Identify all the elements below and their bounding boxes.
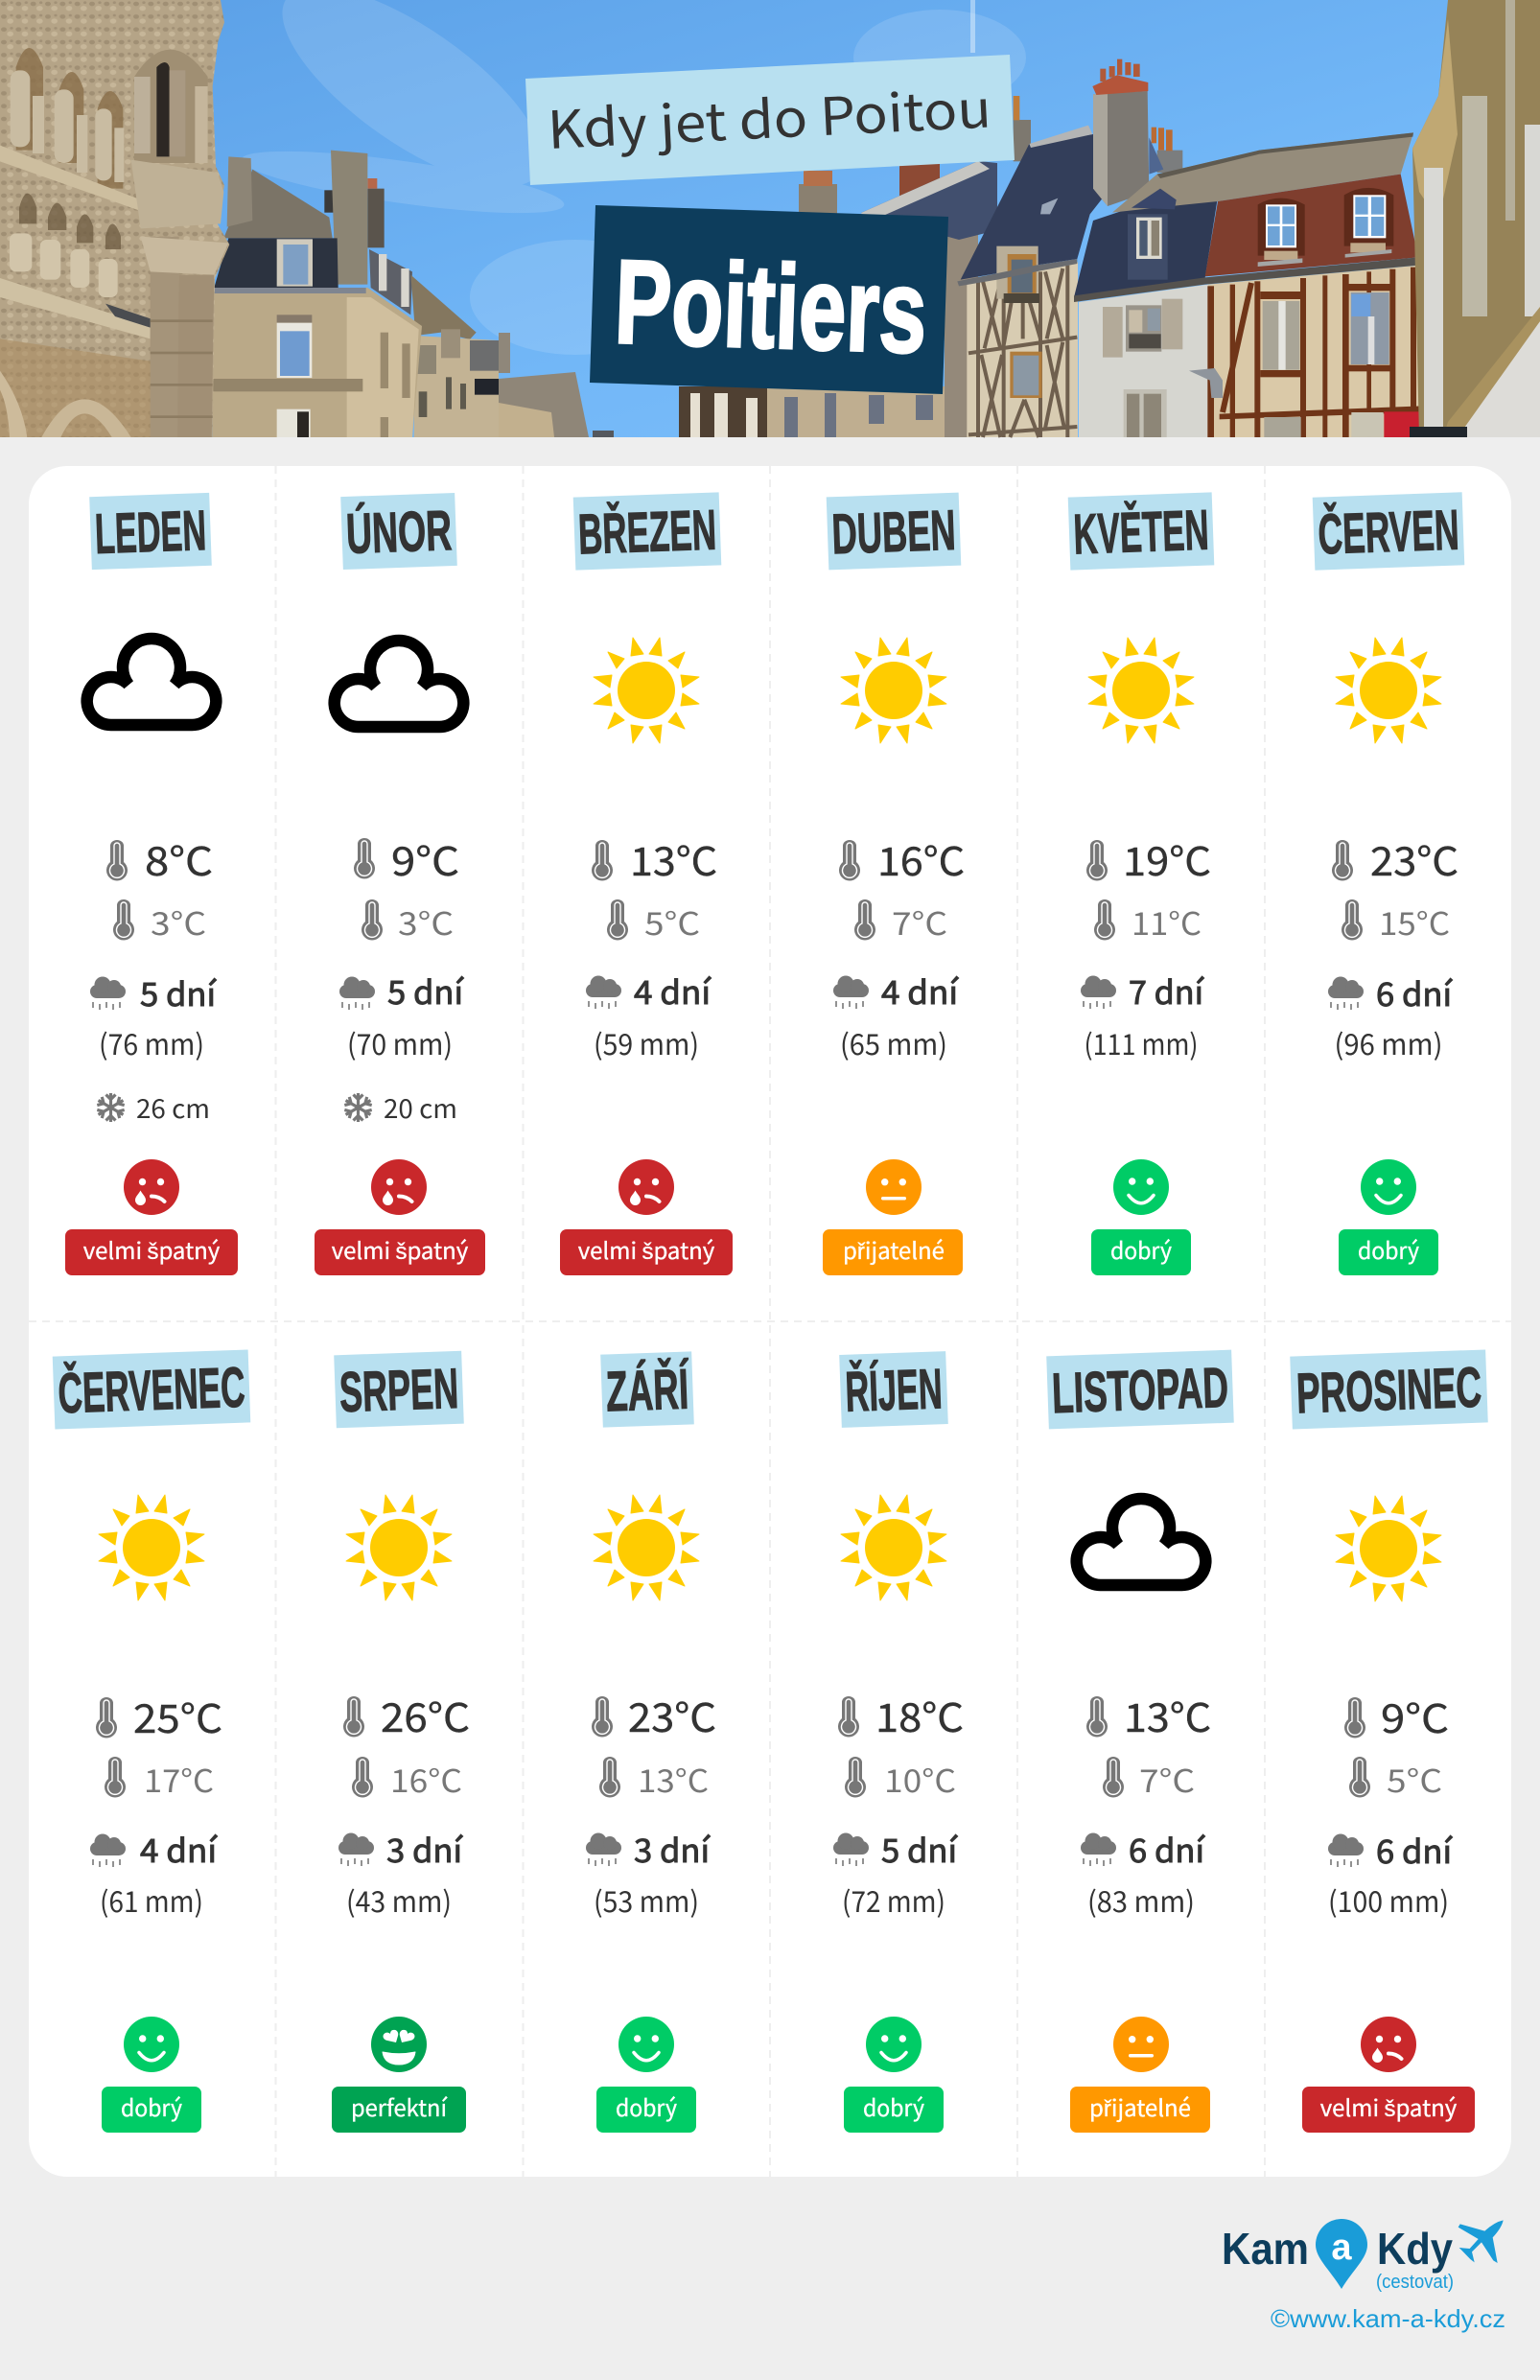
high temperature: 19°C: [1123, 829, 1211, 887]
rating badge: [844, 2087, 944, 2133]
cathedral: [0, 0, 229, 437]
icon: thermometer high: [343, 1696, 364, 1737]
month label: DUBEN: [830, 499, 957, 566]
icon: thermometer low: [362, 899, 383, 940]
precipitation: (61 mm): [100, 1878, 203, 1921]
rating badge: dobrý: [863, 2089, 924, 2123]
month label: [334, 1351, 464, 1428]
website credit: ©www.kam-a-kdy.cz: [1271, 2304, 1505, 2333]
high temperature: 26°C: [381, 1686, 470, 1743]
icon: rain: [1081, 1833, 1116, 1866]
icon: thermometer high: [592, 840, 613, 880]
icon: rating face: [1361, 1159, 1416, 1215]
panel: srpen: [332, 1351, 470, 2133]
icon: rain: [1081, 976, 1116, 1009]
icon: rain: [90, 976, 126, 1010]
icon: thermometer low: [1094, 899, 1115, 940]
icon: sun: [1088, 638, 1194, 743]
distant chimney and far buildings: [799, 184, 837, 217]
rating badge: [1339, 1229, 1438, 1275]
icon: thermometer low: [845, 1757, 866, 1797]
icon: rating face: [866, 2017, 922, 2072]
chimney right small: [1157, 151, 1182, 173]
low temperature: 5°C: [1387, 1756, 1442, 1802]
icon: sun: [99, 1495, 204, 1600]
rating badge: dobrý: [1110, 1232, 1172, 1266]
month label: ŘÍJEN: [844, 1356, 944, 1424]
month label: BŘEZEN: [577, 498, 717, 566]
snow depth: 20 cm: [384, 1088, 457, 1126]
icon: thermometer high: [592, 1696, 613, 1737]
logo: Kam a Kdy: a: [1331, 2228, 1352, 2268]
stone facade: [213, 288, 422, 437]
panel: listopad: [1046, 1350, 1234, 2133]
icon: rain: [586, 976, 621, 1009]
high temperature: 13°C: [1124, 1686, 1211, 1743]
icon: rating face: [1113, 2017, 1169, 2072]
rating badge: dobrý: [616, 2089, 677, 2123]
panel: zari: [586, 1351, 716, 2133]
precipitation: (76 mm): [99, 1021, 204, 1063]
high temperature: 18°C: [875, 1686, 964, 1743]
rating badge: velmi špatný: [578, 1232, 715, 1266]
big chimney: [1093, 91, 1149, 206]
panel: brezen: [560, 492, 733, 1275]
rating badge: [65, 1229, 238, 1275]
icon: rating face: [618, 1159, 674, 1215]
rating badge: přijatelné: [843, 1232, 945, 1266]
high temperature: 16°C: [877, 829, 965, 887]
rainy days: 5 dní: [881, 1825, 958, 1872]
high temperature: 25°C: [133, 1687, 222, 1744]
icon: sun: [594, 1495, 699, 1600]
icon: sun: [594, 638, 699, 743]
icon: rain: [833, 1833, 869, 1866]
month label: [827, 493, 961, 570]
photo right part: [945, 230, 978, 437]
icon: sun: [346, 1495, 452, 1600]
panel: kveten: [1068, 492, 1214, 1275]
icon: rain: [1328, 1833, 1364, 1867]
high temperature: 9°C: [1381, 1687, 1449, 1744]
slate roof A: [961, 134, 1108, 280]
rating badge: [332, 2087, 466, 2133]
slate roof B: [1074, 200, 1217, 297]
icon: cloud: [335, 641, 463, 727]
low temperature: 13°C: [638, 1756, 709, 1802]
right building: [1412, 0, 1540, 437]
rainy days: 6 dní: [1376, 968, 1453, 1015]
grid dashed dividers: [29, 466, 1511, 2177]
icon: thermometer high: [838, 1696, 859, 1737]
rainy days: 4 dní: [634, 967, 712, 1014]
precipitation: (83 mm): [1087, 1878, 1195, 1921]
icon: thermometer high: [1086, 1696, 1108, 1737]
low temperature: 17°C: [144, 1756, 214, 1802]
icon: thermometer low: [113, 899, 134, 940]
rainy days: 5 dní: [387, 967, 464, 1014]
precipitation: (43 mm): [346, 1878, 452, 1921]
rating badge: perfektní: [351, 2089, 448, 2123]
white building: [1079, 285, 1208, 437]
icon: rating face: [866, 1159, 922, 1215]
precipitation: (100 mm): [1328, 1878, 1449, 1921]
rating badge: [102, 2087, 201, 2133]
rainy days: 7 dní: [1129, 967, 1204, 1014]
half-timber A: [967, 262, 1078, 437]
icon: rain: [339, 976, 375, 1010]
snow depth: 26 cm: [136, 1088, 210, 1126]
precipitation: (96 mm): [1335, 1021, 1442, 1063]
rainy days: 4 dní: [881, 967, 959, 1014]
icon: rain: [833, 976, 869, 1009]
panel: prosinec: [1290, 1349, 1488, 2133]
month label: [53, 1349, 250, 1430]
icon: thermometer high: [1344, 1697, 1365, 1738]
rainy days: 3 dní: [634, 1825, 711, 1872]
left roofs: [223, 170, 333, 238]
icon: rating face: [371, 2017, 427, 2072]
rating badge: dobrý: [121, 2089, 182, 2123]
icon: thermometer low: [607, 899, 628, 940]
icon: thermometer low: [854, 899, 875, 940]
low temperature: 11°C: [1132, 898, 1202, 945]
icon: thermometer high: [1332, 840, 1353, 880]
icon: rating face: [124, 1159, 179, 1215]
icon: thermometer low: [599, 1757, 620, 1797]
low temperature: 7°C: [892, 898, 947, 945]
month label: [1046, 1350, 1234, 1429]
precipitation: (59 mm): [594, 1021, 699, 1063]
panel: rijen: [833, 1351, 964, 2133]
rating badge: dobrý: [1358, 1232, 1419, 1266]
precipitation: (72 mm): [842, 1878, 945, 1921]
precipitation: (65 mm): [840, 1021, 947, 1063]
icon: airplane: [1458, 2220, 1504, 2263]
title banner: Poitiers: Poitiers: [613, 236, 929, 379]
icon: thermometer low: [1103, 1757, 1124, 1797]
title banner: Poitiers: [590, 205, 948, 394]
high temperature: 23°C: [628, 1686, 716, 1743]
month label: [573, 492, 721, 571]
icon: rain: [90, 1833, 126, 1867]
high temperature: 8°C: [145, 829, 213, 887]
photo left part: [0, 0, 499, 437]
month label: [839, 1351, 948, 1428]
icon: rain: [338, 1833, 374, 1866]
icon: rain: [586, 1833, 621, 1866]
rainy days: 3 dní: [386, 1825, 463, 1872]
icon: sun: [841, 1495, 946, 1600]
icon: rating face: [618, 2017, 674, 2072]
low temperature: 7°C: [1139, 1756, 1195, 1802]
rating badge: přijatelné: [1089, 2089, 1191, 2123]
half-timber C: [1208, 266, 1423, 437]
low temperature: 3°C: [398, 898, 454, 945]
header photo: Poitiers street with sky: [0, 0, 1540, 437]
icon: snowflake: [96, 1093, 126, 1122]
month label: [600, 1351, 694, 1428]
precipitation: (111 mm): [1084, 1021, 1199, 1063]
rating badge: [596, 2087, 696, 2133]
icon: thermometer low: [105, 1757, 126, 1797]
rating badge: velmi špatný: [83, 1232, 221, 1266]
icon: sun: [1336, 1496, 1441, 1601]
logo: Kam a Kdy: Kam: [1222, 2224, 1309, 2274]
month label: [1068, 492, 1214, 571]
icon: cloud: [1077, 1499, 1205, 1585]
panel: month grid card: [29, 466, 1511, 2177]
rainy days: 6 dní: [1376, 1826, 1453, 1873]
icon: location pin: [1316, 2219, 1367, 2289]
precipitation: (70 mm): [347, 1021, 453, 1063]
month label: ÚNOR: [345, 499, 453, 566]
icon: rating face: [371, 1159, 427, 1215]
month label: ZÁŘÍ: [605, 1356, 690, 1423]
logo: Kam a Kdy: Kdy: [1377, 2224, 1453, 2274]
rating badge: velmi špatný: [1320, 2089, 1458, 2123]
brick: [1205, 175, 1418, 276]
panel: unor: [315, 493, 485, 1275]
high temperature: 9°C: [391, 829, 459, 887]
icon: thermometer high: [96, 1697, 117, 1738]
panel: duben: [823, 493, 965, 1275]
panel: cerven: [1313, 492, 1464, 1275]
icon: thermometer low: [352, 1757, 373, 1797]
panel: cervenec: [53, 1349, 250, 2133]
icon: thermometer low: [1342, 899, 1363, 940]
month label: LISTOPAD: [1051, 1356, 1229, 1425]
month label: [340, 493, 457, 570]
high temperature: 23°C: [1370, 829, 1458, 887]
high temperature: 13°C: [630, 829, 717, 887]
low temperature: 3°C: [151, 898, 206, 945]
icon: sun: [1336, 638, 1441, 743]
icon: snowflake: [343, 1093, 373, 1122]
low temperature: 15°C: [1379, 898, 1450, 945]
rainy days: 5 dní: [140, 968, 217, 1015]
subtitle banner: Kdy jet do Poitou: [525, 55, 1015, 185]
month label: [1313, 492, 1464, 571]
panel: leden: [65, 493, 238, 1275]
icon: thermometer low: [1349, 1757, 1370, 1797]
rating badge: [1070, 2087, 1210, 2133]
icon: rating face: [1361, 2017, 1416, 2072]
icon: thermometer high: [106, 840, 128, 880]
icon: thermometer high: [1086, 840, 1108, 880]
logo: Kam a Kdy: [1222, 2219, 1504, 2293]
rating badge: [823, 1229, 963, 1275]
rating badge: velmi špatný: [332, 1232, 469, 1266]
rating badge: [1091, 1229, 1191, 1275]
rainy days: 4 dní: [140, 1825, 218, 1872]
rainy days: 6 dní: [1129, 1825, 1205, 1872]
month label: KVĚTEN: [1072, 498, 1210, 566]
precipitation: (53 mm): [594, 1878, 699, 1921]
icon: rating face: [1113, 1159, 1169, 1215]
icon: thermometer high: [354, 838, 375, 878]
month label: SRPEN: [338, 1357, 459, 1424]
icon: rating face: [124, 2017, 179, 2072]
subtitle banner: Kdy jet do Poitou: Kdy jet do Poitou: [546, 66, 992, 164]
icon: thermometer high: [839, 840, 860, 880]
low temperature: 5°C: [644, 898, 700, 945]
rating badge: [560, 1229, 733, 1275]
month label: ČERVENEC: [57, 1355, 246, 1425]
month label: LEDEN: [94, 499, 207, 566]
icon: rain: [1328, 976, 1364, 1010]
low temperature: 16°C: [390, 1756, 462, 1802]
icon: cloud: [87, 639, 216, 725]
rating badge: [315, 1229, 485, 1275]
low temperature: 10°C: [884, 1756, 956, 1802]
tile roof: [1112, 132, 1413, 213]
icon: sun: [841, 638, 946, 743]
rating badge: [1302, 2087, 1475, 2133]
logo: Kam a Kdy: (cestovat): [1376, 2272, 1454, 2293]
month label: [89, 493, 212, 570]
